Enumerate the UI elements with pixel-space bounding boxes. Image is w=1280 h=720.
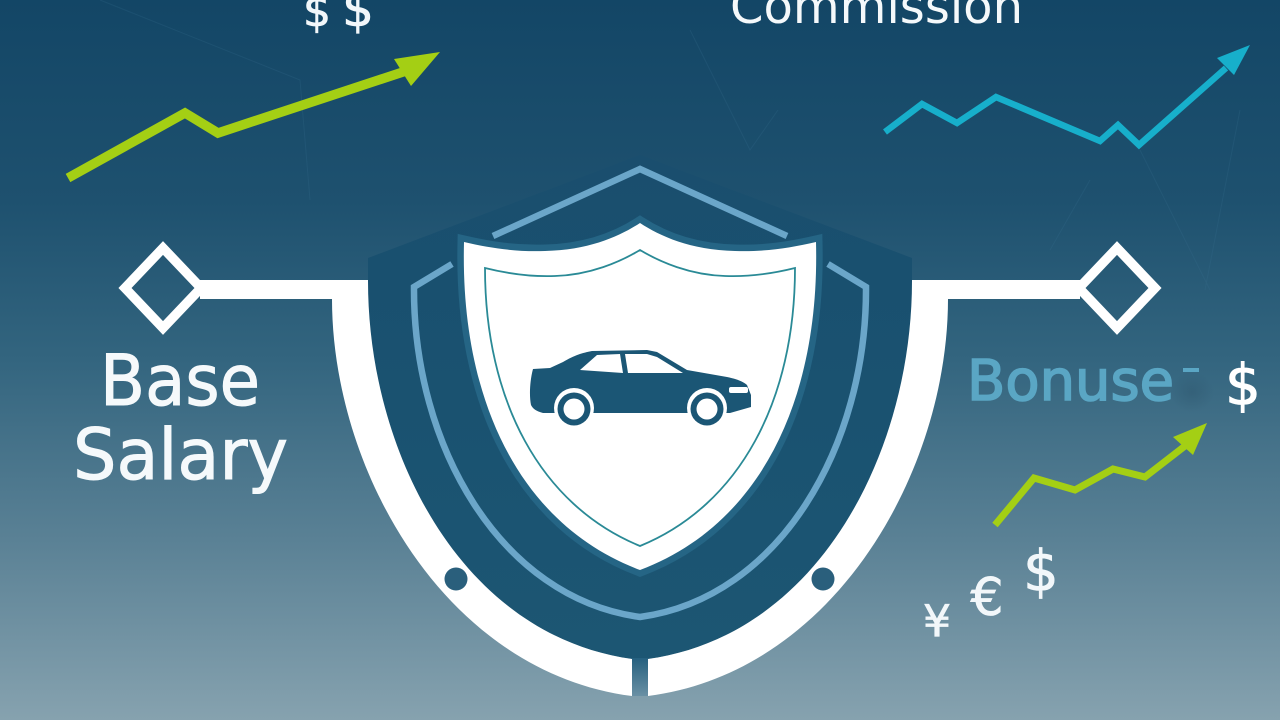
dollar symbol right: $ xyxy=(1225,353,1261,418)
currency symbols bottom xyxy=(923,539,1059,647)
dollar symbols top xyxy=(303,0,374,38)
chart arrow: base salary growth xyxy=(68,52,440,178)
heading: Base Salary: Salary xyxy=(73,414,288,496)
currency symbols bottom: € xyxy=(970,568,1004,628)
rivet left xyxy=(444,568,468,590)
shield light outline xyxy=(414,169,866,617)
diamond left xyxy=(125,248,201,328)
diamond right xyxy=(1079,248,1155,328)
rivet right xyxy=(812,568,834,590)
heading: Base Salary xyxy=(73,340,288,496)
shield inner line xyxy=(485,250,795,546)
chart arrow: bonus growth xyxy=(995,423,1207,525)
currency symbols bottom: $ xyxy=(1023,539,1059,604)
main white shield xyxy=(464,223,816,570)
currency symbols bottom: ¥ xyxy=(923,596,951,647)
shield backing xyxy=(368,155,912,659)
outer shield band and connectors xyxy=(200,280,1080,696)
heading: Base Salary: Base xyxy=(100,340,260,422)
centre stem xyxy=(632,658,648,696)
chart arrow: commission growth xyxy=(885,45,1250,145)
icon: car xyxy=(530,350,751,428)
heading: Bonuses: Bonuse xyxy=(967,349,1174,414)
